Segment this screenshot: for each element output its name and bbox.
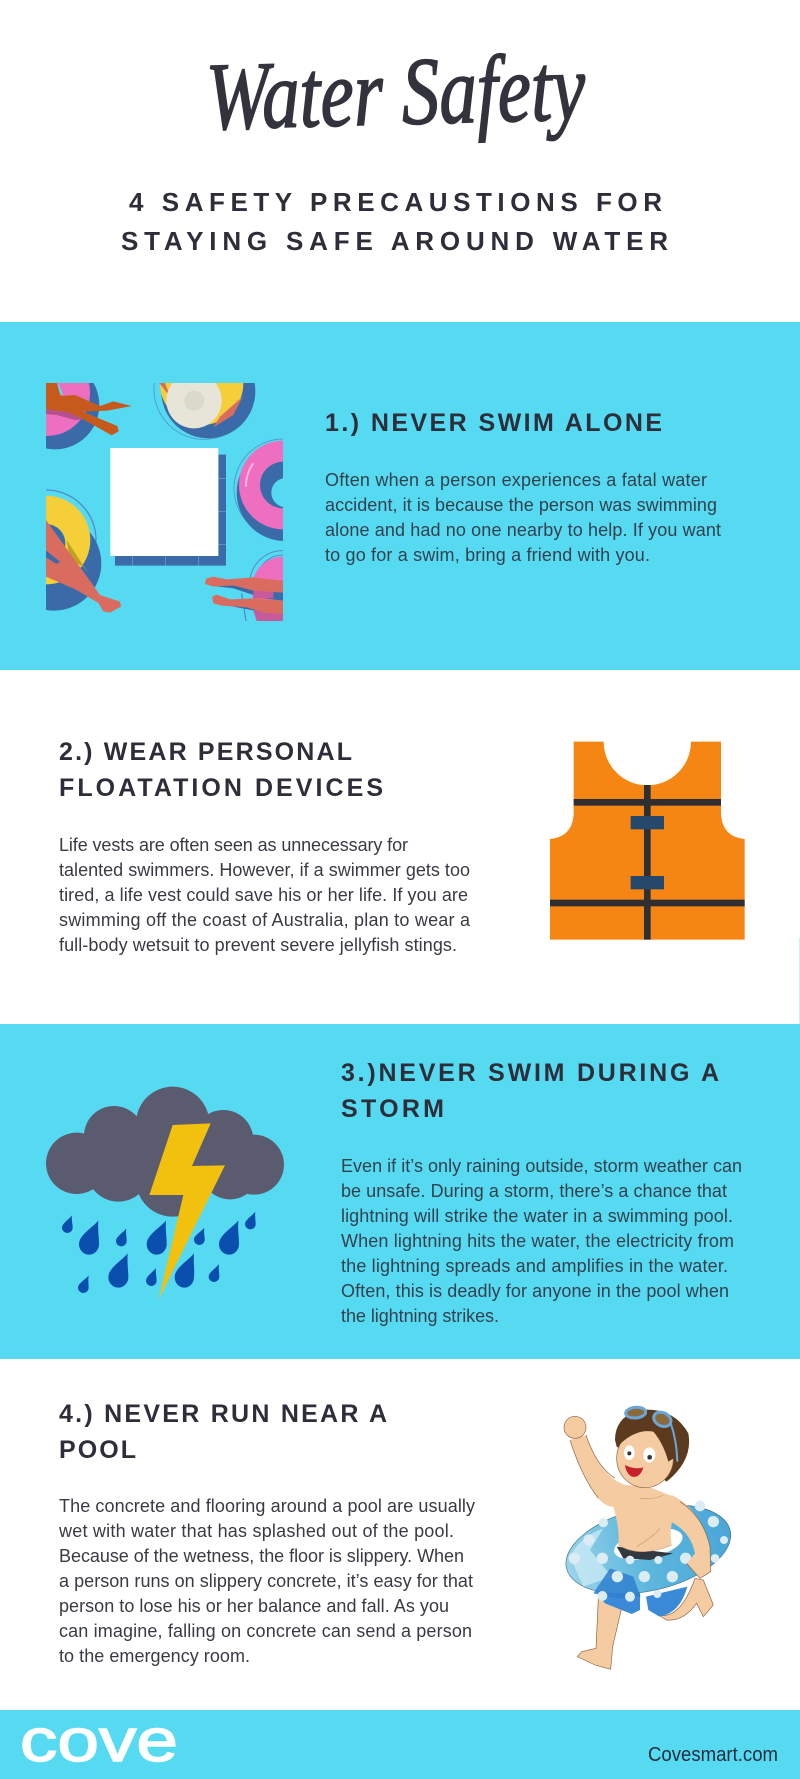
body text 4: person to lose his or her balance and fall. As you [59,1596,449,1616]
white square [110,448,218,556]
body text 4: Because of the wetness, the floor is slippery. When [59,1546,464,1566]
heading 4: 4.) NEVER RUN NEAR A [59,1400,387,1428]
heading 1: 1.) NEVER SWIM ALONE [325,409,662,437]
body text 3: be unsafe. During a storm, there’s a chance that [341,1181,727,1201]
body text 4: wet with water that has splashed out of the pool. [58,1521,454,1541]
body text 2: talented swimmers. However, if a swimmer gets too [59,860,470,880]
body text 1: alone and had no one nearby to help. If you want [325,520,721,540]
illustration: boy with swim ring [557,1406,739,1669]
torso [613,1485,677,1552]
heading 4 [59,1400,387,1464]
subtitle [121,187,668,256]
lower arm [663,1495,711,1578]
float: bottom right pink with legs [205,550,283,621]
body text 4 [58,1496,475,1666]
panel: footer [0,1707,800,1779]
heading 3 [341,1059,719,1123]
body text 2: Life vests are often seen as unnecessary for [59,835,408,855]
body text 4: can imagine, falling on concrete can send a person [59,1621,472,1641]
float: left yellow with legs [46,489,121,613]
body text 2: full-body wetsuit to prevent severe jellyfish stings. [59,935,457,955]
subtitle: 4 SAFETY PRECAUSTIONS FOR [129,187,662,217]
heading 3: 3.)NEVER SWIM DURING A [341,1059,719,1087]
lightning bolt [149,1123,225,1299]
float: top left pink with legs [46,383,132,450]
body text 4: a person runs on slippery concrete, it’s easy for that [59,1571,473,1591]
body text 3: Often, this is deadly for anyone in the pool when [341,1281,729,1301]
website: Covesmart.com [648,1744,778,1766]
pool tile shadow [115,455,226,566]
body text 3: When lightning hits the water, the electricity from [341,1231,734,1251]
raised arm [570,1435,632,1507]
title: Water Safety [205,33,587,150]
body text 2: tired, a life vest could save his or her life. If you are [59,885,468,905]
body text 1: accident, it is because the person was swimming [325,495,717,515]
shorts [595,1588,640,1614]
icon: storm cloud [46,1087,284,1299]
icon: life vest [550,742,745,940]
float: top centre cream [154,383,256,440]
panel: never run near a pool [58,1400,739,1669]
heading 2: 2.) WEAR PERSONAL [59,738,352,766]
panel: never swim during a storm [0,1024,800,1359]
head [615,1406,689,1488]
body text 4: The concrete and flooring around a pool are usually [59,1496,475,1516]
body text 3: Even if it’s only raining outside, storm weather can [341,1156,742,1176]
body text 3: lightning will strike the water in a swimming pool. [341,1206,733,1226]
legs [577,1578,713,1669]
body text 3: the lightning spreads and amplifies in the water. [341,1256,728,1276]
heading 4: POOL [59,1436,136,1464]
rain drops [62,1212,256,1293]
goggles [625,1406,673,1429]
illustration: pool floats [0,339,333,621]
heading 2: FLOATATION DEVICES [59,774,383,802]
panel: personal floatation devices [59,738,745,955]
body text 1 [325,470,721,565]
panel: header [121,33,668,256]
body text 2 [59,835,471,955]
body text 3 [341,1156,742,1326]
body text 2: swimming off the coast of Australia, plan to wear a [59,910,471,930]
cloud [46,1087,284,1217]
subtitle: STAYING SAFE AROUND WATER [121,226,668,256]
body text 1: Often when a person experiences a fatal water [325,470,707,490]
body text 3: the lightning strikes. [341,1306,499,1326]
swim ring [557,1490,739,1609]
logo: cove: cove [20,1707,178,1774]
panel: never swim alone [0,322,800,670]
float: right pink [234,438,283,541]
body text 1: to go for a swim, bring a friend with you. [325,545,650,565]
body text 4: to the emergency room. [59,1646,250,1666]
ring dots [569,1501,728,1602]
heading 3: STORM [341,1095,444,1123]
heading 2 [59,738,383,802]
